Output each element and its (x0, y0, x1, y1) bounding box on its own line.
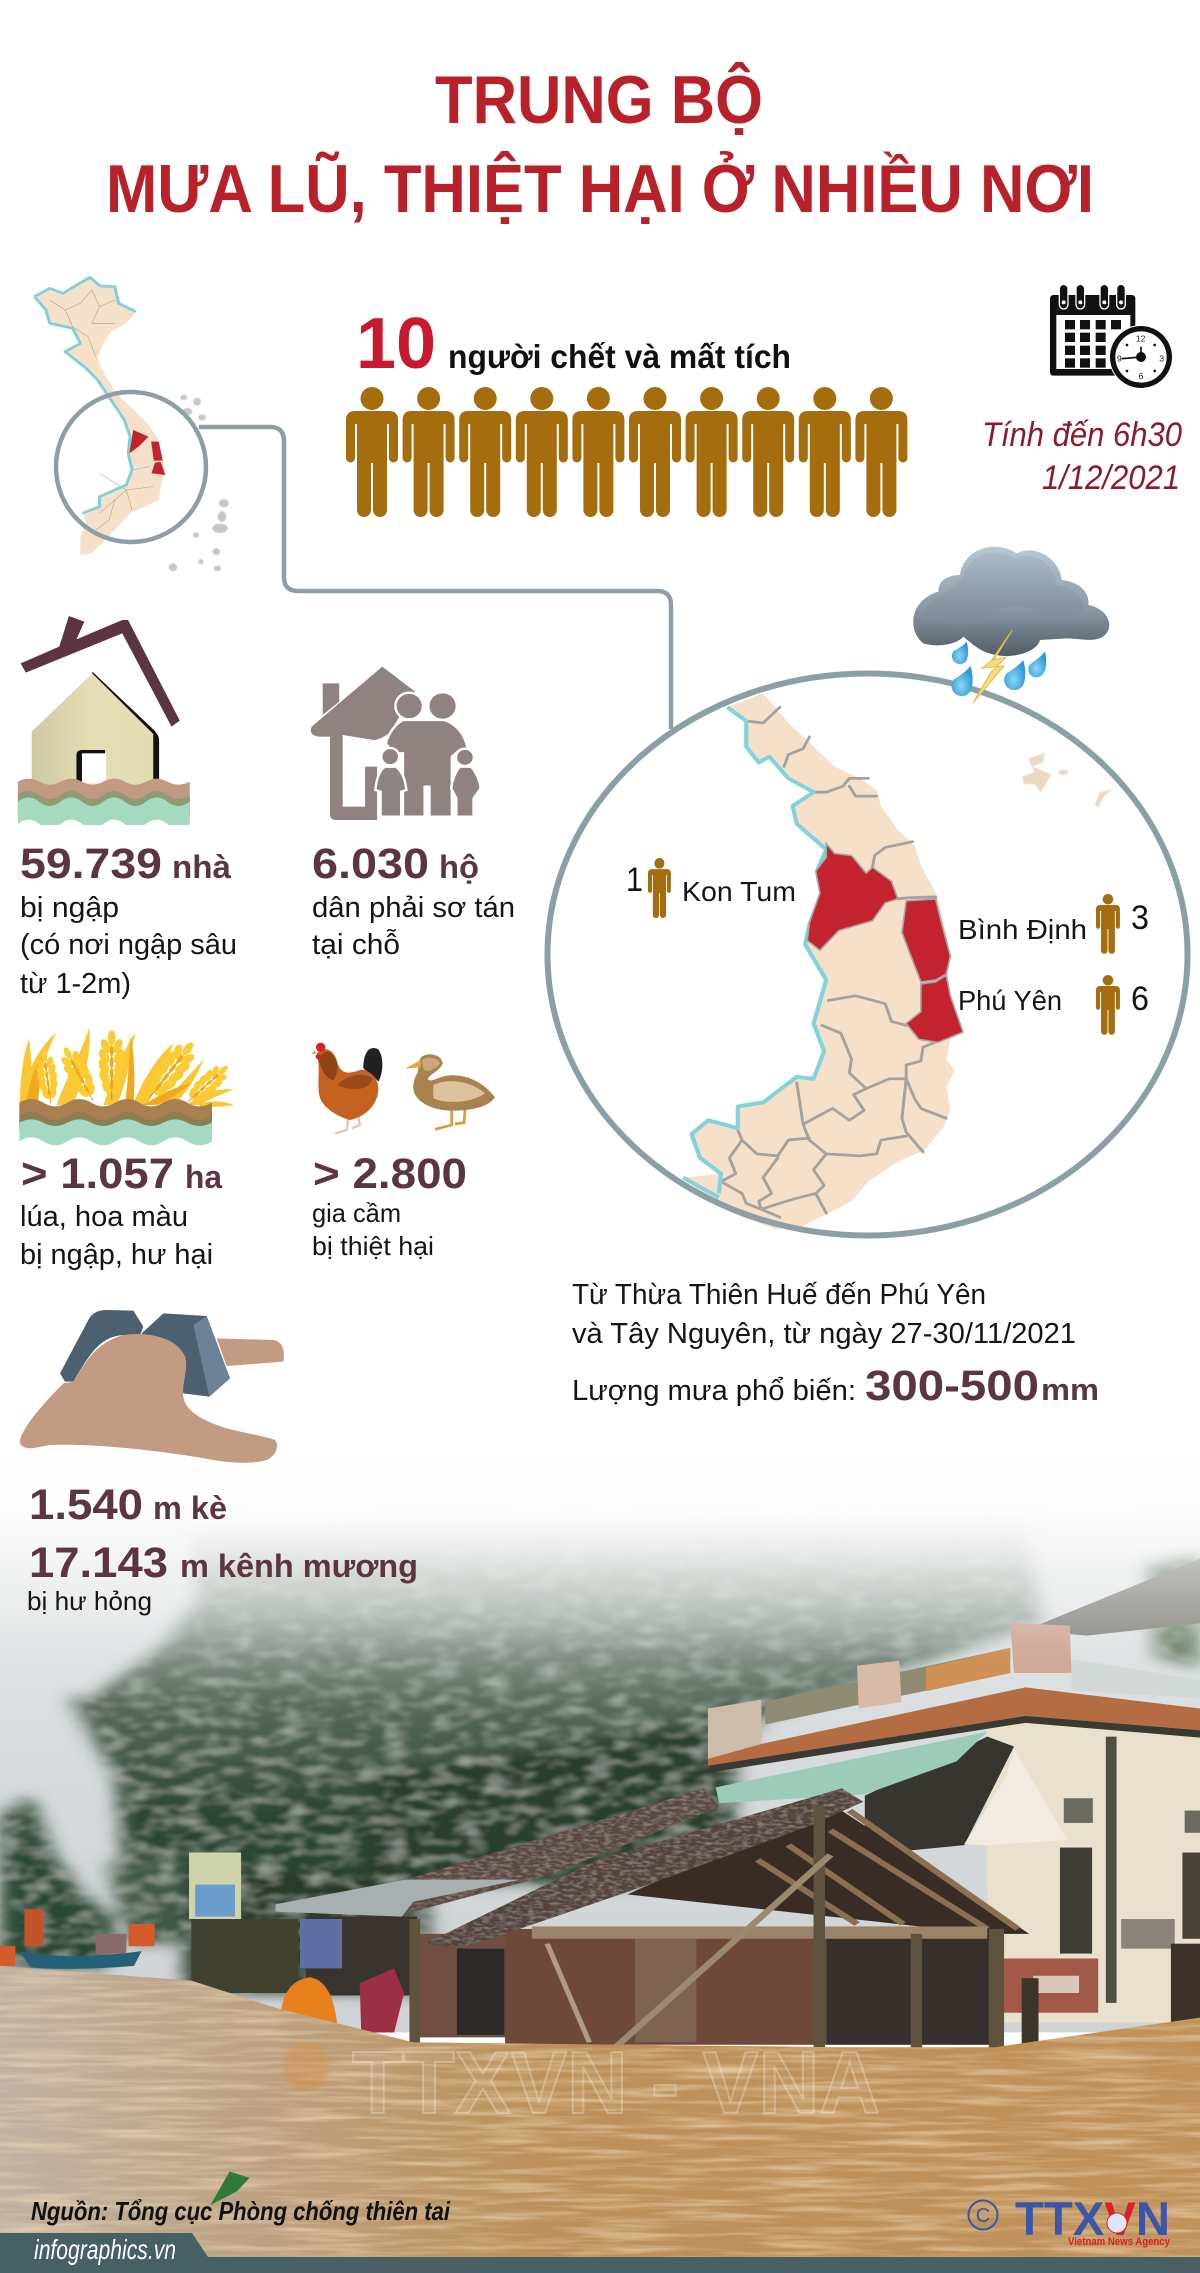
label: Bình Định: 3 (1131, 899, 1149, 937)
stat: poultry (312, 1150, 467, 1261)
rainfall note: mm (1041, 1372, 1099, 1407)
headline: 10 dead and missing: người chết và mất tích (448, 338, 791, 375)
label: Kon Tum: 1 (626, 861, 643, 899)
region: Bình Định (902, 899, 950, 982)
source: Nguồn: Tổng cục Phòng chống thiên tai (31, 2196, 451, 2226)
stat: evacuated households: dân phải sơ tán (312, 892, 515, 924)
rainfall note: 300-500 (865, 1362, 1039, 1410)
walls (306, 1917, 417, 1995)
title: MƯA LŨ, THIỆT HẠI Ở NHIỀU NƠI (106, 150, 1094, 227)
panel: detail map of the region (683, 693, 1112, 1229)
icon: storm cloud (913, 547, 1109, 703)
stat: flooded houses: (có nơi ngập sâu (20, 929, 237, 961)
headline: 10 dead and missing (356, 304, 791, 384)
rainfall note (572, 1279, 1099, 1410)
duck (405, 1054, 495, 1129)
title: TRUNG BỘ (435, 61, 763, 138)
label: Bình Định (958, 894, 1149, 954)
region: Phú Yên (906, 975, 963, 1042)
detail map circle (548, 674, 1188, 1236)
photo: flooded village (0, 1524, 1200, 2257)
footer bar (0, 2233, 1200, 2273)
label: Kon Tum: Kon Tum (682, 876, 796, 907)
stat: evacuated households: tại chỗ (312, 928, 400, 961)
date note: Tính đến 6h30 (982, 416, 1182, 454)
stat: rice and crops (20, 1150, 222, 1271)
logo: TTXVN: C (976, 2205, 990, 2227)
main roof (628, 1803, 1029, 1934)
upper building (1026, 1559, 1200, 1636)
stat: embankment and canals: m kè (153, 1490, 227, 1526)
stat: evacuated households: hộ (439, 849, 479, 885)
stat: embankment and canals: 1.540 (29, 1481, 143, 1529)
people and boat (279, 1977, 338, 2042)
stat: flooded houses: từ 1-2m) (20, 968, 131, 1000)
label: Phú Yên: Phú Yên (958, 985, 1062, 1016)
stat: embankment and canals: bị hư hỏng (27, 1586, 152, 1616)
stat: rice and crops: ha (185, 1159, 222, 1195)
map: Vietnam locator (34, 277, 229, 571)
lightning bolt (973, 630, 1012, 703)
icon: chicken and duck (311, 1043, 495, 1133)
stat: poultry: > 2.800 (313, 1150, 467, 1198)
rainfall note: Lượng mưa phổ biến: (572, 1375, 856, 1407)
stat: embankment and canals: m kênh mương (180, 1548, 418, 1584)
stat: evacuated households (312, 840, 515, 961)
watermark: TTXVN - VNA (352, 2033, 880, 2132)
site name: infographics.vn (34, 2234, 176, 2265)
label: Phú Yên (958, 975, 1149, 1035)
icon: calendar and clock: 12 (1136, 333, 1146, 343)
date note (982, 416, 1182, 497)
title (106, 61, 1094, 227)
label: Phú Yên: 6 (1131, 980, 1149, 1018)
shop roof (390, 1788, 719, 1912)
stat: flooded houses: bị ngập (20, 892, 119, 924)
stat: rice and crops: bị ngập, hư hại (20, 1239, 213, 1271)
stat: embankment and canals: 17.143 (29, 1539, 168, 1587)
locator circle (56, 392, 206, 542)
logo: TTXVN: Vietnam News Agency (1068, 2236, 1171, 2248)
label: Kon Tum (626, 858, 796, 918)
icon: family and house (311, 667, 481, 820)
stat: poultry: gia cầm (312, 1198, 401, 1228)
stat: flooded houses (20, 840, 237, 1000)
stat: flooded houses: 59.739 (20, 840, 162, 888)
date note: 1/12/2021 (1042, 459, 1180, 497)
label: Bình Định: Bình Định (958, 914, 1087, 945)
logo: TTXVN: TTXVN (1015, 2192, 1170, 2245)
icon: calendar and clock (1050, 284, 1173, 389)
raindrops (951, 642, 1046, 696)
icon: calendar and clock: 6 (1139, 371, 1144, 381)
flood water (0, 1966, 1200, 2257)
icon: flooded rice field (19, 1027, 235, 1152)
icon row: ten people (346, 387, 907, 517)
icon: calendar and clock: 9 (1117, 353, 1122, 363)
chicken (311, 1043, 382, 1133)
rainfall note: Từ Thừa Thiên Huế đến Phú Yên (572, 1279, 986, 1311)
stat: embankment and canals (27, 1481, 418, 1616)
icon: flooded house (18, 616, 190, 833)
region: Kon Tum (807, 844, 898, 950)
stat: poultry: bị thiệt hại (312, 1231, 434, 1261)
headline: 10 dead and missing: 10 (356, 304, 436, 384)
sign and fence (189, 1852, 241, 1919)
islands (1022, 753, 1112, 808)
stat: evacuated households: 6.030 (312, 840, 429, 888)
stat: rice and crops: lúa, hoa màu (20, 1201, 188, 1233)
rainfall note: và Tây Nguyên, từ ngày 27-30/11/2021 (572, 1318, 1076, 1350)
icon: damaged embankment (20, 1310, 284, 1463)
trees (0, 1520, 1200, 1993)
leaf (210, 2171, 249, 2205)
icon: calendar and clock: 3 (1159, 353, 1164, 363)
connector line (199, 427, 671, 729)
stat: rice and crops: > 1.057 (21, 1150, 174, 1198)
photo fade (0, 1440, 1200, 1660)
stat: flooded houses: nhà (172, 849, 231, 885)
